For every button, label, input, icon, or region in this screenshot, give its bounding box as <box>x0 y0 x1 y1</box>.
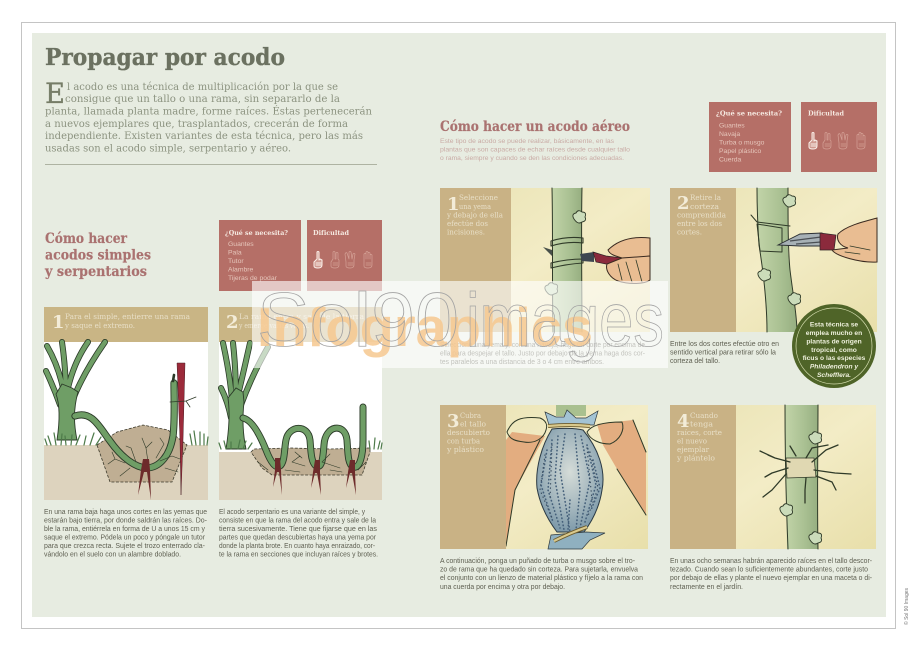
step label: raíces, corte <box>677 428 722 437</box>
credit: © Sol 90 Images <box>903 587 910 625</box>
step text: corteza del tallo. <box>670 358 720 365</box>
illustration: removing bark <box>670 188 877 332</box>
illustration: wrapping with plastic <box>440 405 648 549</box>
icon: hand two fingers <box>823 132 831 149</box>
step label: 4 <box>677 411 690 432</box>
step label: Seleccione <box>459 193 498 202</box>
panel: qué se necesita (aéreo): Cuerda <box>719 156 742 164</box>
heading: acodos simples y serpentarios <box>44 231 151 280</box>
step label: entre los dos <box>677 219 722 228</box>
step text: En una rama baja haga unos cortes en las yemas que <box>44 509 207 516</box>
panel: dificultad (simple) <box>307 220 382 291</box>
icon: hand three fingers <box>345 252 355 268</box>
panel: dificultad (simple): Dificultad <box>313 229 350 237</box>
icon: hand four fingers <box>857 132 865 149</box>
step text: saque el extremo. Pódela un poco y póngale un tutor <box>44 534 206 542</box>
intro text block: consigue que un tallo o una rama, sin separarlo de la <box>65 94 340 105</box>
step label: 3 <box>447 411 460 432</box>
callout: tropical plants: Esta técnica se <box>810 322 858 328</box>
panel: step 2 acodo serpentario <box>219 307 382 558</box>
callout: tropical plants: Schefflera. <box>817 372 851 379</box>
step text: ella para despejar el tallo. Justo por debajo de la yema haga dos cor- <box>440 350 645 358</box>
callout: tropical plants <box>792 304 876 388</box>
subheading text: Este tipo de acodo se puede realizar, básicamente, en las <box>440 138 615 145</box>
callout: tropical plants: tropical, como <box>811 347 857 354</box>
watermark <box>252 278 668 368</box>
step text: sentido vertical para retirar sólo la <box>670 350 776 356</box>
step text: En unas ocho semanas habrán aparecido raíces en el tallo descor- <box>670 558 872 565</box>
step header: y emerge varias veces. <box>238 321 309 330</box>
icon: hand three fingers <box>838 132 848 149</box>
step header: La rama entra y sale de la tierra <box>239 312 365 321</box>
step text <box>219 509 378 558</box>
step text: el conjunto con un lienzo de material plástico y fíjelo a la rama con <box>440 575 643 582</box>
step text <box>44 509 207 558</box>
panel: qué se necesita (simple): ¿Qué se necesita? <box>225 229 288 237</box>
step header: Para el simple, entierre una rama <box>65 312 191 321</box>
watermark: Sol90 <box>257 278 459 363</box>
step label: 1 <box>447 194 460 215</box>
panel: qué se necesita (simple): Guantes <box>228 241 254 248</box>
step text: Entre los dos cortes efectúe otro en <box>670 341 779 348</box>
callout: tropical plants: emplea mucho en <box>806 330 862 337</box>
step text: consiste en que la rama del acodo entra y sale de la <box>219 518 376 524</box>
intro text block: E <box>45 77 65 110</box>
step text <box>670 341 779 365</box>
intro text block: independiente. Existen variantes de esta técnica, pero las más <box>45 131 363 142</box>
branches <box>221 343 268 418</box>
panel: qué se necesita (aéreo) <box>709 102 791 172</box>
step label: efectúe dos <box>447 219 488 228</box>
branches <box>46 342 105 405</box>
step label: Cuando <box>690 411 718 420</box>
step label <box>670 405 736 549</box>
step text: estarán bajo tierra, por donde saldrán las raíces. Do- <box>44 518 207 524</box>
subheading text: plantas que son capaces de echar raíces desde cualquier tallo <box>440 146 630 154</box>
illustration: new roots <box>670 405 876 549</box>
heading: acodo aéreo: Cómo hacer un acodo aéreo <box>440 119 630 135</box>
step label: con turba <box>447 436 481 446</box>
step label: ejemplar <box>677 445 710 454</box>
step text <box>440 342 645 366</box>
panel: dificultad (aéreo) <box>801 102 877 172</box>
step text: para que crezca recta. Sujete el trozo enterrado cla- <box>44 543 205 550</box>
illustration: simple layering <box>44 342 208 500</box>
intro text block <box>45 77 373 154</box>
icon: hand four fingers <box>364 252 372 268</box>
callout: tropical plants: ficus o las especies <box>803 355 866 362</box>
step header: y saque el extremo. <box>64 321 135 330</box>
intro text block: usadas son el acodo simple, serpentario y aéreo. <box>45 144 291 154</box>
illustration: cutting the stem <box>440 188 650 332</box>
step label: corteza <box>690 202 720 211</box>
panel: qué se necesita (simple): Tijeras de podar <box>228 275 278 282</box>
step label: cortes. <box>677 228 702 236</box>
heading: acodos simples y serpentarios: Cómo hacer <box>45 231 128 247</box>
step text: zo de rama que ha quedado sin corteza. Para sujetarla, envuelva <box>440 566 638 574</box>
panel: qué se necesita (aéreo): Navaja <box>719 131 740 138</box>
icon: hand one finger <box>809 132 817 149</box>
step text: rectamente en el jardín. <box>670 584 743 591</box>
step label: y plástico <box>446 445 484 454</box>
step text: tierra sucesivamente. Tiene que fijarse que en las <box>219 526 378 533</box>
step label: Cubra <box>460 411 482 420</box>
step text: Seleccione una yema y, con una navaja, haga un corte por encima de <box>440 342 645 349</box>
panel: qué se necesita (simple) <box>219 220 301 291</box>
intro text block: a nuevos ejemplares que, trasplantados, crecerán de forma <box>45 119 348 130</box>
watermark: images <box>466 278 664 363</box>
title: Propagar por acodo <box>45 44 285 71</box>
step header: 2 <box>226 312 239 333</box>
panel: qué se necesita (simple): Pala <box>228 250 242 256</box>
watermark: Infographics <box>257 296 593 358</box>
panel: qué se necesita (simple): Alambre <box>228 266 254 274</box>
step text: A continuación, ponga un puñado de turba o musgo sobre el tro- <box>440 558 635 565</box>
step label: una yema <box>459 202 492 211</box>
subheading text <box>440 138 630 162</box>
step text: tes paralelos a una distancia de 3 o 4 cm entre ambos. <box>440 359 604 366</box>
panel: aéreo step 1 <box>440 188 650 366</box>
panel: qué se necesita (aéreo): ¿Qué se necesita? <box>716 110 782 118</box>
step label <box>440 188 511 332</box>
step label: el tallo <box>460 420 486 428</box>
step label: incisiones. <box>447 228 485 236</box>
step label: 2 <box>677 193 690 214</box>
panel: qué se necesita (aéreo): Guantes <box>719 122 745 130</box>
icon: hand one finger <box>314 252 322 268</box>
icon: hand two fingers <box>331 252 339 268</box>
panel: step 1 acodo simple <box>44 307 208 558</box>
step label: comprendida <box>677 210 727 220</box>
heading: acodos simples y serpentarios: y serpentarios <box>44 264 147 280</box>
panel: qué se necesita (aéreo): Papel plástico <box>719 148 762 155</box>
panel: qué se necesita (simple): Tutor <box>228 258 244 265</box>
step text: vándolo en el suelo con un alambre doblado. <box>44 552 181 558</box>
step text: por debajo de ellas y plante el nuevo ejemplar en una maceta o di- <box>670 575 872 582</box>
step header <box>44 307 208 342</box>
step label <box>670 188 736 332</box>
panel: aéreo step 2 <box>670 188 877 365</box>
step label: descubierto <box>447 428 490 437</box>
callout: tropical plants: Philadendron y <box>810 364 858 370</box>
panel: dificultad (aéreo): Dificultad <box>808 110 845 118</box>
panel: aéreo step 3 <box>440 405 648 591</box>
callout: tropical plants: plantas de origen <box>806 338 862 346</box>
step header: 1 <box>52 312 65 333</box>
step label: tenga <box>690 420 714 428</box>
step label: y debajo de ella <box>446 210 504 220</box>
step label: y plántelo <box>676 454 715 462</box>
step label: el nuevo <box>677 436 707 446</box>
subheading text: o rama, siempre y cuando se den las condiciones adecuadas. <box>440 155 624 162</box>
illustration: serpentine layering <box>219 342 382 500</box>
step text: una cuerda por encima y otra por debajo. <box>440 584 565 591</box>
panel: aéreo step 4 <box>670 405 876 591</box>
step text: donde la planta brote. En cuanto haya enraizado, cor- <box>219 543 375 550</box>
step text: ble la rama, entiérrela en forma de U a unos 15 cm y <box>44 526 206 533</box>
intro text block: planta, llamada planta madre, forme raíces. Éstas pertenecerán <box>45 106 373 118</box>
panel: qué se necesita (aéreo): Turba o musgo <box>719 140 765 146</box>
heading: acodos simples y serpentarios: acodos simples <box>45 248 151 264</box>
step text: te la rama en secciones que incluyan raíces y brotes. <box>219 552 378 558</box>
intro text block: l acodo es una técnica de multiplicación por la que se <box>67 82 338 93</box>
step header <box>219 307 382 342</box>
step text <box>670 558 872 591</box>
step text: tezado. Cuando sean lo suficientemente abundantes, corte justo <box>670 566 868 574</box>
step text <box>440 558 643 591</box>
step label: Retire la <box>690 193 722 202</box>
step text: El acodo serpentario es una variante del simple, y <box>219 509 366 516</box>
step text: partes que quedan descubiertas haya una yema por <box>219 534 377 542</box>
step label <box>440 405 506 549</box>
